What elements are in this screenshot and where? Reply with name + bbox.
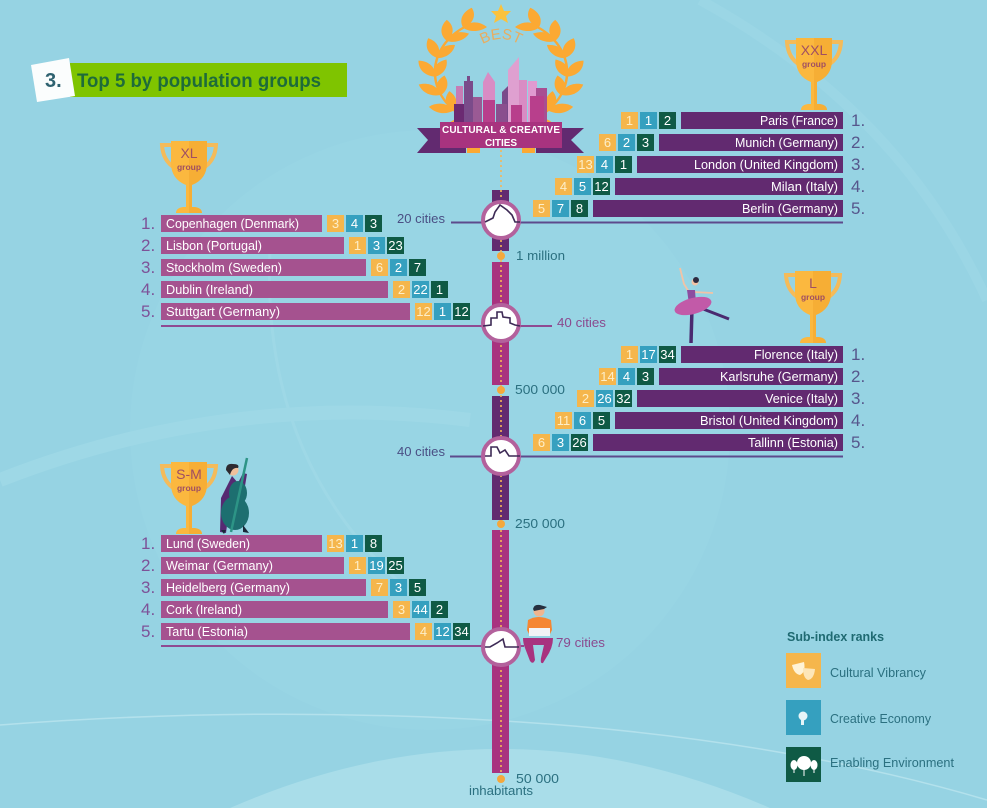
labels: city counts and population thresholds: 50 000: [516, 771, 559, 786]
row: Venice: Venice (Italy): [765, 392, 838, 406]
row: Stuttgart: 5.: [141, 302, 155, 321]
row: Venice: [577, 389, 865, 408]
row: Weimar: 1: [354, 558, 361, 573]
legend item: enabling environment: [786, 747, 955, 782]
row: Lisbon: 3: [373, 238, 380, 253]
row: Stockholm: 2: [395, 260, 402, 275]
row: Lisbon: [141, 236, 404, 255]
row: Dublin: 1: [436, 282, 443, 297]
row: Stockholm: 3.: [141, 258, 155, 277]
labels: city counts and population thresholds: 1 million: [516, 248, 565, 263]
row: Weimar: [141, 556, 404, 575]
row: Lund: 1.: [141, 534, 155, 553]
row: Lund: 1: [351, 536, 358, 551]
row: Milan: [555, 177, 865, 196]
row: Weimar: Weimar (Germany): [166, 559, 273, 573]
figure: ballerina: [673, 268, 729, 343]
legend item: cultural vibrancy: Cultural Vibrancy: [830, 666, 927, 680]
row: Tallinn: 26: [572, 435, 587, 450]
ribbon banner: CITIES: [485, 138, 517, 149]
star: [491, 4, 511, 23]
row: Lund: [141, 534, 382, 553]
row: Stuttgart: 1: [439, 304, 446, 319]
labels: city counts and population thresholds: 20 cities: [397, 211, 445, 226]
row: Berlin: [533, 199, 865, 218]
best text: BEST: [479, 28, 524, 44]
row: Tartu: Tartu (Estonia): [166, 625, 248, 639]
icon: S-M trophy: S-M: [176, 466, 202, 482]
row: Tartu: 5.: [141, 622, 155, 641]
icon: L trophy: L: [809, 275, 817, 291]
row: Karlsruhe: 3: [642, 369, 649, 384]
title number: 3.: [45, 70, 62, 92]
icon: S-M skyline circle: [483, 629, 519, 665]
icon: XXL trophy: XXL: [801, 42, 827, 58]
icon: XL trophy: [162, 141, 216, 213]
panel: XL group: [141, 141, 470, 321]
row: London: 4: [601, 157, 608, 172]
row: Stockholm: 7: [414, 260, 421, 275]
row: Copenhagen: 3: [370, 216, 377, 231]
row: Tartu: 4: [420, 624, 427, 639]
row: Bristol: 6: [579, 413, 586, 428]
row: Paris: 1: [645, 113, 652, 128]
row: Lund: 8: [370, 536, 377, 551]
row: Stuttgart: Stuttgart (Germany): [166, 305, 280, 319]
legend item: enabling environment: Enabling Environment: [830, 756, 955, 770]
labels: city counts and population thresholds: inhabitants: [469, 783, 533, 798]
row: Heidelberg: Heidelberg (Germany): [166, 581, 290, 595]
row: Bristol: [555, 411, 865, 430]
row: Cork: 2: [436, 602, 443, 617]
icon: XL trophy: XL: [180, 145, 198, 161]
row: Karlsruhe: 2.: [851, 367, 865, 386]
row: Dublin: 2: [398, 282, 405, 297]
row: Dublin: 22: [413, 282, 428, 297]
row: Paris: Paris (France): [760, 114, 838, 128]
row: Munich: [599, 133, 865, 152]
row: Munich: 2: [623, 135, 630, 150]
legend item: creative economy: Creative Economy: [830, 712, 932, 726]
row: Munich: 3: [642, 135, 649, 150]
population axis: [492, 150, 509, 783]
row: Heidelberg: 5: [414, 580, 421, 595]
row: Venice: 32: [616, 391, 631, 406]
row: Copenhagen: [141, 214, 382, 233]
row: London: 1: [620, 157, 627, 172]
row: Cork: 4.: [141, 600, 155, 619]
row: Florence: Florence (Italy): [754, 348, 838, 362]
row: Stockholm: [141, 258, 426, 277]
row: Cork: [141, 600, 448, 619]
row: Stockholm: Stockholm (Sweden): [166, 261, 282, 275]
icon: L trophy: [786, 271, 840, 343]
row: Tallinn: 3: [557, 435, 564, 450]
row: Heidelberg: 7: [376, 580, 383, 595]
labels: city counts and population thresholds: 500 000: [515, 382, 565, 397]
row: Weimar: 2.: [141, 556, 155, 575]
title text: Top 5 by population groups: [77, 71, 321, 92]
icon: S-M trophy: [162, 462, 216, 534]
row: Lund: 13: [328, 536, 343, 551]
row: Stockholm: 6: [376, 260, 383, 275]
row: Lisbon: 2.: [141, 236, 155, 255]
row: Munich: 6: [604, 135, 611, 150]
row: Lund: Lund (Sweden): [166, 537, 250, 551]
row: Weimar: 25: [388, 558, 403, 573]
row: Copenhagen: 4: [351, 216, 358, 231]
laurel wreath: [418, 8, 584, 132]
row: Lisbon: 1: [354, 238, 361, 253]
row: Milan: 12: [594, 179, 609, 194]
legend: sub-index ranks: [786, 630, 955, 782]
ribbon banner: [417, 122, 584, 153]
row: Copenhagen: Copenhagen (Denmark): [166, 217, 299, 231]
icon: XXL skyline circle: [483, 202, 520, 238]
icon: L trophy: group: [801, 292, 825, 302]
row: Bristol: 4.: [851, 411, 865, 430]
row: Lisbon: Lisbon (Portugal): [166, 239, 262, 253]
row: Lisbon: 23: [388, 238, 403, 253]
row: Florence: 1: [626, 347, 633, 362]
row: Dublin: Dublin (Ireland): [166, 283, 253, 297]
row: Berlin: Berlin (Germany): [742, 202, 838, 216]
row: Karlsruhe: Karlsruhe (Germany): [720, 370, 838, 384]
row: Berlin: 5.: [851, 199, 865, 218]
row: Tallinn: [533, 433, 865, 452]
title number tag: [31, 58, 75, 102]
row: Milan: 4: [560, 179, 567, 194]
row: Heidelberg: [141, 578, 426, 597]
row: Heidelberg: 3: [395, 580, 402, 595]
row: Paris: 1: [626, 113, 633, 128]
row: Heidelberg: 3.: [141, 578, 155, 597]
row: Berlin: 7: [557, 201, 564, 216]
row: Karlsruhe: 14: [600, 369, 615, 384]
legend item: creative economy: [786, 700, 932, 735]
row: Paris: 2: [664, 113, 671, 128]
row: Copenhagen: 3: [332, 216, 339, 231]
row: Venice: 3.: [851, 389, 865, 408]
row: Stuttgart: [141, 302, 470, 321]
row: Cork: 3: [398, 602, 405, 617]
row: Milan: 5: [579, 179, 586, 194]
row: Munich: Munich (Germany): [735, 136, 838, 150]
row: Milan: Milan (Italy): [771, 180, 838, 194]
panel: S-M group: [141, 462, 470, 641]
row: Bristol: 5: [598, 413, 605, 428]
row: Copenhagen: 1.: [141, 214, 155, 233]
title bar: [70, 63, 347, 97]
emblem: best cultural and creative cities: [417, 4, 584, 153]
row: Tallinn: Tallinn (Estonia): [748, 436, 838, 450]
row: Cork: Cork (Ireland): [166, 603, 242, 617]
row: Tartu: [141, 622, 470, 641]
row: Tartu: 34: [454, 624, 469, 639]
group divider lines: [161, 222, 843, 646]
row: Berlin: 8: [576, 201, 583, 216]
labels: city counts and population thresholds: 79 cities: [556, 635, 606, 650]
row: Florence: [621, 345, 865, 364]
row: London: London (United Kingdom): [694, 158, 838, 172]
row: Cork: 44: [413, 602, 428, 617]
row: Bristol: Bristol (United Kingdom): [700, 414, 838, 428]
row: Bristol: 11: [557, 413, 570, 428]
row: London: 13: [578, 157, 593, 172]
row: Karlsruhe: [599, 367, 865, 386]
row: Milan: 4.: [851, 177, 865, 196]
row: London: 3.: [851, 155, 865, 174]
legend heading: Sub-index ranks: [787, 630, 884, 644]
panel: L group: [533, 271, 865, 452]
icon: L skyline circle: [483, 438, 520, 474]
row: Florence: 1.: [851, 345, 865, 364]
icon: XL skyline circle: [483, 305, 520, 341]
icon: XL trophy: group: [177, 162, 201, 172]
row: Venice: 2: [582, 391, 589, 406]
row: Tallinn: 5.: [851, 433, 865, 452]
icon: XXL trophy: group: [802, 59, 826, 69]
labels: city counts and population thresholds: 40 cities: [397, 444, 445, 459]
legend item: cultural vibrancy: [786, 653, 927, 688]
row: Florence: 34: [660, 347, 675, 362]
title: [31, 58, 347, 102]
icon: XXL trophy: [787, 38, 841, 110]
row: Karlsruhe: 4: [623, 369, 630, 384]
figure: person with laptop: [523, 605, 553, 663]
labels: city counts and population thresholds: 40 cities: [557, 315, 607, 330]
panel: XXL group: [533, 38, 865, 218]
row: Tartu: 12: [435, 624, 450, 639]
row: Paris: 1.: [851, 111, 865, 130]
row: Tallinn: 6: [538, 435, 545, 450]
labels: city counts and population thresholds: 250 000: [515, 516, 565, 531]
icon: S-M trophy: group: [177, 483, 201, 493]
row: Berlin: 5: [538, 201, 545, 216]
labels: city counts and population thresholds: [397, 211, 607, 798]
figure: double bass player: [220, 458, 249, 534]
row: Venice: 26: [597, 391, 612, 406]
row: Florence: 17: [641, 347, 656, 362]
row: Stuttgart: 12: [454, 304, 469, 319]
row: Dublin: [141, 280, 448, 299]
ribbon banner: CULTURAL & CREATIVE: [442, 125, 560, 136]
city skyline: [454, 57, 547, 122]
row: Paris: [621, 111, 865, 130]
row: Dublin: 4.: [141, 280, 155, 299]
row: Weimar: 19: [369, 558, 384, 573]
row: London: [577, 155, 865, 174]
row: Stuttgart: 12: [416, 304, 431, 319]
row: Munich: 2.: [851, 133, 865, 152]
